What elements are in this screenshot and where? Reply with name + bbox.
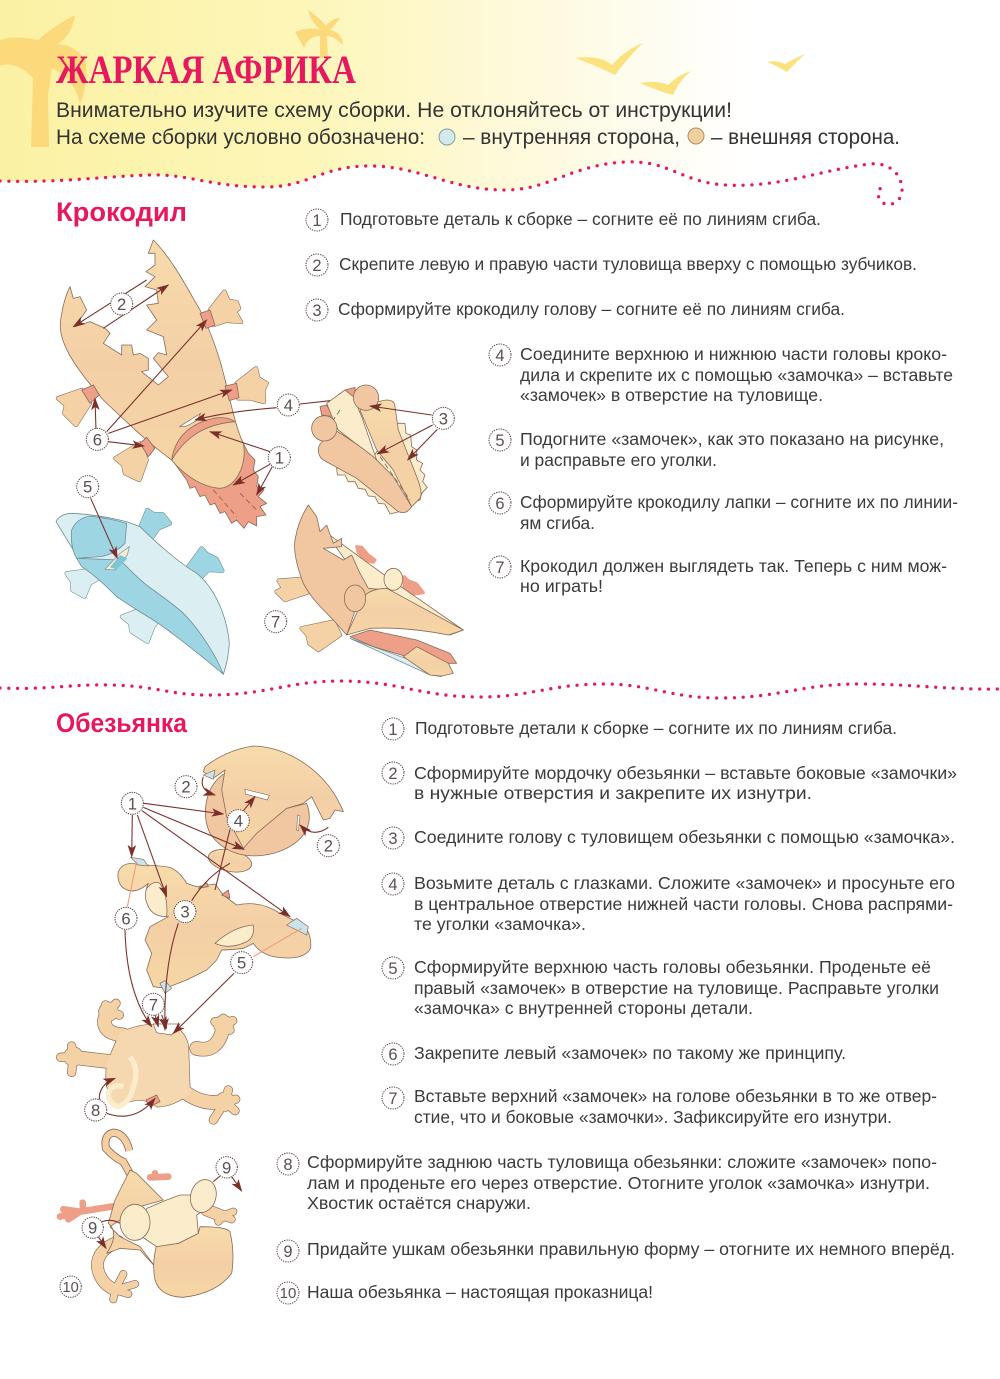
dotted divider middle [0,681,1000,698]
intro text: На схеме сборки условно обозначено: [56,125,425,149]
steps: crocodile: Соедините верхнюю и нижнюю части головы кроко- [520,344,947,364]
birds [575,43,805,95]
monkey step labels [85,776,339,1121]
intro text: Внимательно изучите схему сборки. Не отклоняйтесь от инструкции! [56,98,732,122]
steps: monkey: Хвостик остаётся снаружи. [307,1193,531,1213]
monkey step labels: 1 [128,794,137,813]
steps: crocodile: 3 [312,302,322,320]
steps: crocodile: 6 [495,495,505,513]
crocodile head part [312,385,427,514]
steps: monkey: правый «замочек» в отверстие на туловище. Расправьте уголки [414,978,939,998]
steps: monkey: в нужные отверстия и закрепите их изнутри. [414,783,812,803]
intro text: – внутренняя сторона, [463,125,680,149]
steps: monkey: 4 [388,876,398,894]
monkey step labels: 8 [91,1101,100,1120]
steps: monkey: Вставьте верхний «замочек» на голове обезьянки в то же отвер- [414,1086,937,1106]
crocodile diagrams [56,240,463,677]
steps: crocodile: ям сгиба. [520,513,595,533]
crocodile step labels: 5 [83,478,92,497]
steps: monkey: Возьмите деталь с глазками. Сложите «замочек» и просуньте его [414,873,955,893]
crocodile flat part [58,240,267,528]
heading: monkey: Обезьянка [56,708,188,738]
steps: crocodile: дила и скрепите их с помощью «замочка» – вставьте [520,365,953,385]
crocodile arrows [73,280,437,558]
steps: crocodile [306,209,958,596]
intro text [56,98,900,149]
crocodile step labels: 2 [117,295,126,314]
steps: crocodile: 5 [495,432,505,450]
steps: monkey: Сформируйте заднюю часть туловища обезьянки: сложите «замочек» попо- [307,1152,937,1172]
monkey assembled: 9 [222,1158,231,1177]
header background [0,0,1000,190]
steps: crocodile: «замочек» в отверстие на туловище. [520,385,823,405]
monkey assembled: 10 [63,1280,79,1296]
steps: crocodile: 7 [495,559,505,577]
monkey head part [203,746,343,876]
steps: monkey: Сформируйте мордочку обезьянки – вставьте боковые «замочки» [414,763,957,783]
steps: monkey: лам и проденьте его через отверстие. Отогните уголок «замочка» изнутри. [307,1173,930,1193]
steps: crocodile: Подогните «замочек», как это показано на рисунке, [520,429,944,449]
steps: monkey: Подготовьте детали к сборке – согните их по линиям сгиба. [415,718,897,738]
steps: monkey: 1 [388,721,398,739]
monkey step labels: 2 [181,778,191,797]
crocodile step labels [77,293,454,633]
steps: crocodile: 1 [312,212,322,230]
steps: monkey: Наша обезьянка – настоящая проказница! [307,1282,653,1302]
monkey assembled [60,1133,242,1299]
monkey body part [61,1003,236,1120]
steps: monkey: Соедините голову с туловищем обезьянки с помощью «замочка». [414,827,955,847]
steps: monkey: те уголки «замочка». [414,914,586,934]
monkey diagrams [61,746,343,1121]
crocodile step labels: 6 [93,430,102,449]
steps: monkey: Закрепите левый «замочек» по такому же принципу. [414,1043,846,1063]
steps: monkey: 5 [388,960,398,978]
steps: monkey: 9 [283,1243,293,1261]
monkey step labels: 2 [324,837,333,856]
steps: crocodile: Подготовьте деталь к сборке – согните её по линиям сгиба. [340,209,821,229]
steps: crocodile: Сформируйте крокодилу голову – согните её по линиям сгиба. [338,299,845,319]
title: ЖАРКАЯ АФРИКА [56,47,356,92]
monkey arrows [99,777,328,1116]
steps: monkey: 10 [280,1285,296,1302]
steps: crocodile: Крокодил должен выглядеть так. Теперь с ним мож- [520,556,947,576]
heading: crocodile: Крокодил [56,197,187,227]
steps: crocodile: Скрепите левую и правую части туловища вверху с помощью зубчиков. [339,254,917,274]
steps: crocodile: 2 [312,257,322,275]
crocodile step labels: 3 [439,409,448,428]
monkey step labels: 4 [234,812,243,831]
monkey step labels: 6 [121,909,131,928]
monkey step labels: 7 [149,995,158,1014]
dotted divider top [0,162,902,204]
steps: monkey: в центральное отверстие нижней части головы. Снова распрями- [414,894,953,914]
monkey step labels: 5 [237,954,246,973]
steps: monkey: 7 [388,1090,398,1108]
steps: monkey: 8 [283,1156,293,1174]
steps: monkey: стие, что и боковые «замочки». Зафиксируйте его изнутри. [414,1107,892,1127]
crocodile step labels: 7 [271,613,280,632]
monkey torso part [118,857,311,993]
steps: monkey: Сформируйте верхнюю часть головы обезьянки. Проденьте её [414,957,931,977]
steps: monkey: Придайте ушкам обезьянки правильную форму – отогните их немного вперёд. [307,1239,955,1259]
steps: crocodile: Сформируйте крокодилу лапки – согните их по линии- [520,492,958,512]
steps: monkey: 6 [388,1046,398,1064]
intro text: – внешняя сторона. [711,125,900,149]
steps: monkey: 3 [388,830,398,848]
crocodile step labels: 1 [275,449,284,468]
monkey step labels: 3 [180,903,190,922]
steps: monkey: «замочка» с внутренней стороны детали. [414,998,753,1018]
steps: crocodile: и расправьте его уголки. [520,450,717,470]
steps: crocodile: но играть! [520,576,603,596]
monkey assembled: 9 [88,1219,97,1238]
steps: monkey: 2 [388,765,398,783]
crocodile step labels: 4 [284,396,293,415]
crocodile blue inner side [56,510,229,674]
steps: monkey [277,718,957,1304]
crocodile assembled [277,505,463,677]
palm trees [0,10,343,147]
steps: crocodile: 4 [495,347,505,365]
